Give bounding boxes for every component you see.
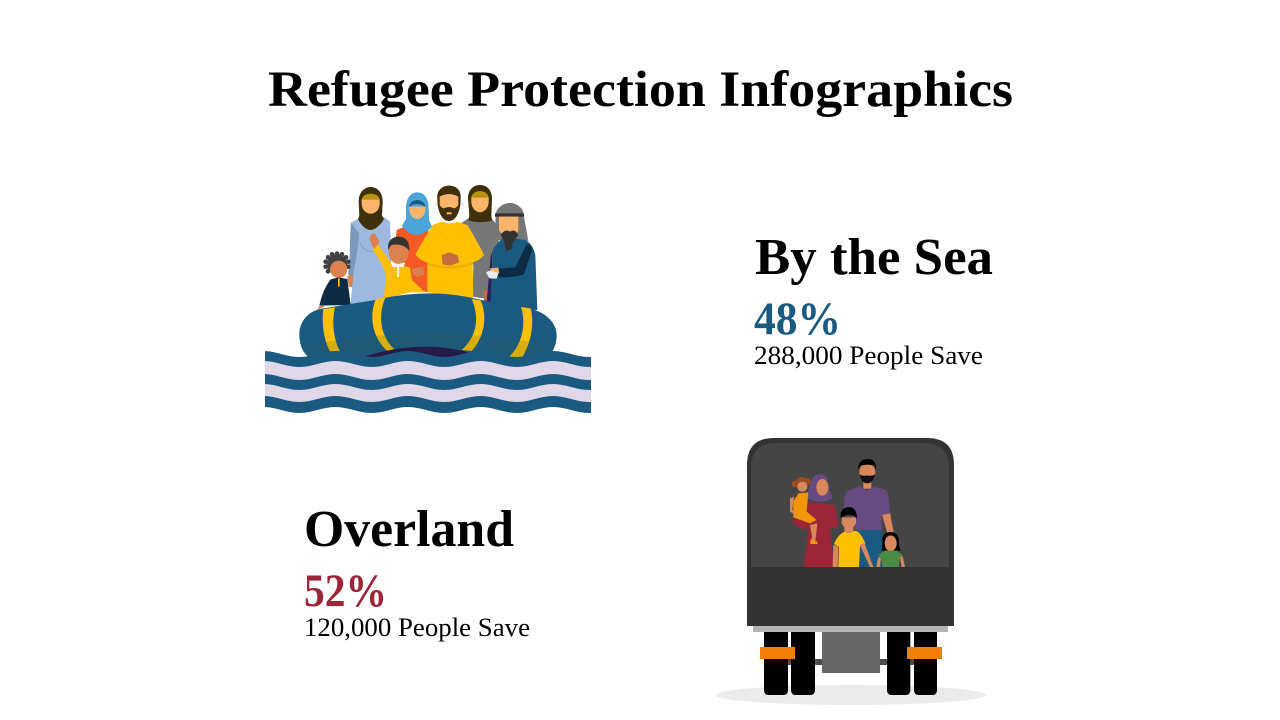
truck opening [751, 443, 949, 567]
child with curly hair [317, 251, 351, 309]
heading: Overland: Overland [304, 501, 514, 558]
girl in green [876, 532, 905, 567]
stat: 48%: 48% [754, 293, 841, 345]
rear wheels [764, 630, 937, 695]
family [790, 459, 905, 567]
elderly man with beard [486, 203, 537, 310]
waving child in yellow [369, 233, 425, 299]
girl on arm [790, 477, 817, 544]
text: 288,000 People Save: 288,000 People Save [754, 341, 983, 370]
truck body [747, 438, 954, 626]
inflatable boat [299, 293, 557, 358]
mud flap center [822, 630, 880, 673]
illustration: refugees on a boat [265, 185, 591, 413]
man in yellow robe [415, 186, 484, 300]
boy in yellow [833, 507, 873, 567]
orange reflectors [760, 647, 942, 659]
woman in blue dress [347, 187, 392, 304]
woman in grey [461, 185, 500, 302]
illustration: family in the back of a truck [716, 438, 986, 705]
bumper [753, 625, 948, 632]
waves [265, 351, 591, 413]
stat: 52%: 52% [304, 565, 387, 617]
truck axle [788, 659, 915, 665]
woman in blue headscarf and orange dress [396, 192, 432, 292]
title: Refugee Protection Infographics [268, 62, 1013, 118]
ground shadow [716, 685, 986, 705]
heading: By the Sea: By the Sea [755, 229, 993, 286]
mother [792, 474, 838, 567]
father [844, 459, 894, 567]
text: 120,000 People Save: 120,000 People Save [304, 613, 530, 642]
